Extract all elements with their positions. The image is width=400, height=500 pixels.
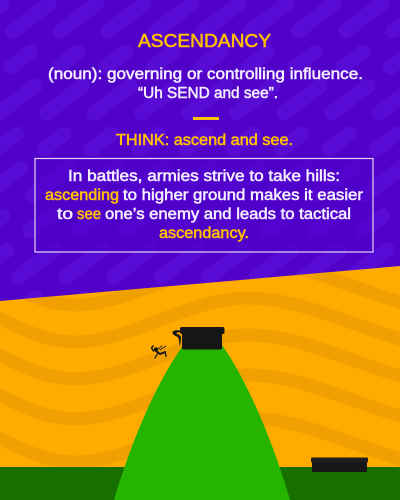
- dark green ground: [0, 467, 400, 500]
- orange desert ground: [0, 266, 400, 500]
- green hill: [114, 345, 290, 500]
- think line: THINK: ascend and see.: [116, 132, 293, 149]
- callout box: ascending: [45, 187, 119, 204]
- definition: “Uh SEND and see”.: [138, 85, 278, 102]
- fortress on ground: [311, 458, 368, 472]
- title: ASCENDANCY: [138, 30, 271, 51]
- callout box: In battles, armies strive to take hills:: [68, 168, 340, 185]
- definition: (noun): governing or controlling influence.: [48, 66, 363, 83]
- callout box: ascendancy.: [159, 225, 249, 242]
- fortress on hill: [172, 327, 224, 350]
- definition: [48, 66, 363, 102]
- callout box: see: [77, 206, 101, 223]
- callout box: one’s enemy and leads to tactical: [105, 206, 351, 223]
- purple background: [0, 0, 400, 313]
- callout box: [35, 158, 373, 252]
- divider rule: [193, 117, 219, 120]
- falling figure: [152, 346, 166, 358]
- sand waves: [0, 261, 400, 462]
- callout box: to higher ground makes it easier: [123, 187, 364, 204]
- callout box: to: [57, 206, 73, 223]
